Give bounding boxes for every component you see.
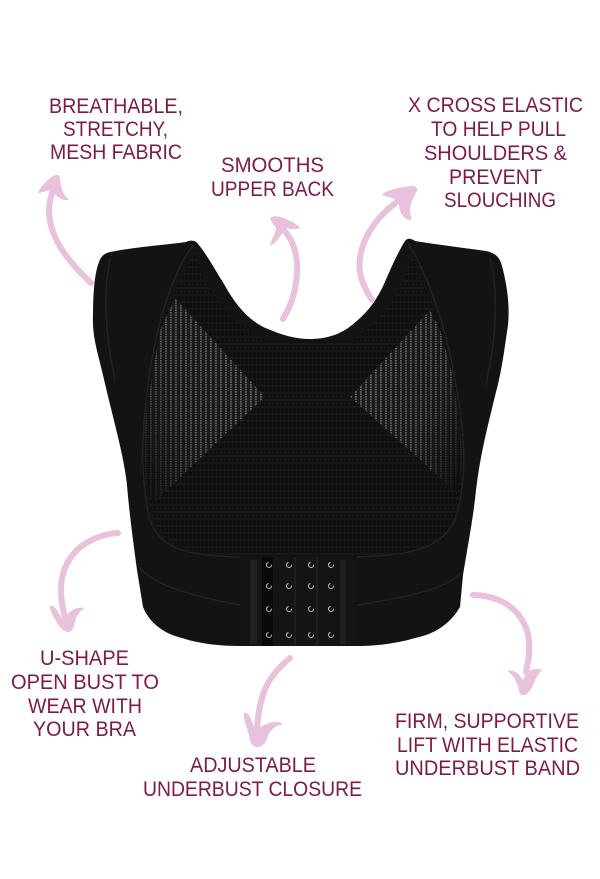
text: u-shape open bust: WEAR WITH xyxy=(28,695,142,718)
text: u-shape open bust xyxy=(11,647,159,741)
knit inner panel xyxy=(144,250,464,557)
arrow: x cross elastic xyxy=(360,186,417,300)
text: x cross elastic: X CROSS ELASTIC xyxy=(408,94,583,117)
text: breathable mesh fabric: BREATHABLE, xyxy=(49,95,183,118)
text: u-shape open bust: U-SHAPE xyxy=(40,647,129,670)
text: breathable mesh fabric xyxy=(49,95,183,164)
arrow: underbust band xyxy=(473,595,542,695)
text: adjustable underbust closure: UNDERBUST CLOSURE xyxy=(143,778,362,801)
text: firm supportive lift xyxy=(395,710,580,780)
garment body xyxy=(93,239,509,646)
text: smooths upper back xyxy=(211,154,334,201)
text: adjustable underbust closure: ADJUSTABLE xyxy=(190,754,316,777)
text: firm supportive lift: FIRM, SUPPORTIVE xyxy=(395,710,579,733)
text: x cross elastic: PREVENT xyxy=(449,166,542,189)
text: smooths upper back: SMOOTHS xyxy=(221,154,324,177)
text: firm supportive lift: UNDERBUST BAND xyxy=(395,757,580,780)
text: breathable mesh fabric: MESH FABRIC xyxy=(50,141,182,164)
garment seams xyxy=(106,243,496,605)
text: u-shape open bust: OPEN BUST TO xyxy=(11,671,159,694)
text: x cross elastic xyxy=(408,94,583,212)
right mesh panel xyxy=(350,310,463,493)
text: firm supportive lift: LIFT WITH ELASTIC xyxy=(397,734,578,757)
text: x cross elastic: TO HELP PULL xyxy=(431,118,566,141)
text: u-shape open bust: YOUR BRA xyxy=(33,718,136,741)
arrow: adjustable closure xyxy=(244,658,290,747)
arrow: u-shape open bust xyxy=(50,533,118,632)
text: adjustable underbust closure xyxy=(143,754,362,801)
product: black posture bra, back view xyxy=(93,239,509,646)
text: breathable mesh fabric: STRETCHY, xyxy=(63,118,168,141)
arrow: mesh fabric xyxy=(38,175,91,283)
text: x cross elastic: SLOUCHING xyxy=(444,189,556,212)
left mesh panel xyxy=(140,298,265,503)
arrow: upper back xyxy=(270,216,300,319)
text: smooths upper back: UPPER BACK xyxy=(211,178,334,201)
hook and eye closure xyxy=(240,557,355,646)
text: x cross elastic: SHOULDERS & xyxy=(424,142,567,165)
